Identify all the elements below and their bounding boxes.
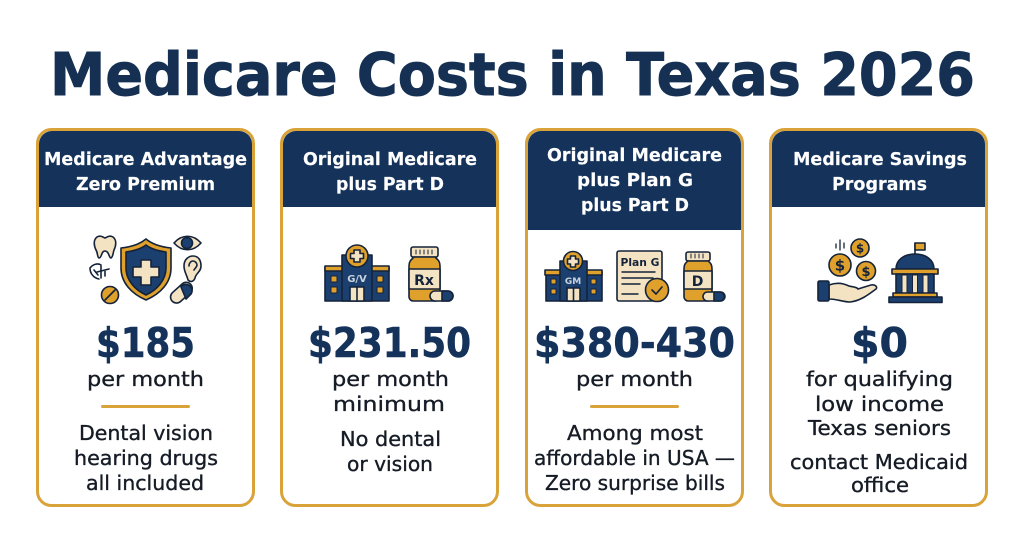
icon: Part D bottle with capsule: D <box>692 274 703 290</box>
icon: government building <box>889 243 942 302</box>
price: $0: $0 <box>851 319 908 367</box>
panel: Original Medicare plus Plan G plus Part D <box>526 130 742 506</box>
icon: coins over open hand: $ <box>835 256 845 274</box>
text: per month minimum: minimum <box>333 392 445 416</box>
text: contact Medicaid office: office <box>851 473 909 497</box>
text: contact Medicaid office <box>790 450 968 497</box>
panel: Original Medicare plus Part D <box>282 130 498 506</box>
text: qualifying seniors: Texas seniors <box>807 416 951 440</box>
icon: tooth <box>94 236 116 258</box>
icon: Part D bottle with capsule <box>684 252 725 301</box>
price: $380-430: $380-430 <box>534 319 735 367</box>
icon: capsule <box>168 280 195 305</box>
panel: Medicare Savings Programs <box>770 130 986 506</box>
text: affordability note <box>534 421 735 495</box>
icon: Plan G document with check: Plan G <box>620 257 660 269</box>
text: per month minimum <box>332 367 449 416</box>
icon: ear <box>184 256 201 281</box>
text: no dental or vision: No dental <box>340 427 441 451</box>
text: included benefits: Dental vision <box>79 421 213 445</box>
panel: Medicare Advantage Zero Premium <box>38 130 254 506</box>
text: qualifying seniors <box>806 367 953 440</box>
text: qualifying seniors: low income <box>815 392 944 416</box>
icon: hospital: G/V <box>347 274 367 285</box>
title: Medicare Costs in Texas 2026 <box>50 40 975 109</box>
text: per month: per month <box>87 367 204 391</box>
icon: hospital <box>545 252 602 301</box>
icon: dental x-ray <box>90 264 109 279</box>
text: qualifying seniors: for qualifying <box>806 367 953 391</box>
panel header: Original Medicare plus Part D <box>283 131 496 207</box>
divider <box>590 405 679 408</box>
icon: hospital: GM <box>565 277 581 287</box>
heading: Original Medicare plus Plan G plus Part D: plus Part D <box>581 195 689 216</box>
price: $231.50: $231.50 <box>308 319 471 367</box>
heading: Original Medicare plus Part D <box>303 149 477 195</box>
text: affordability note: affordable in USA — <box>534 446 735 470</box>
heading: Original Medicare plus Plan G plus Part D <box>547 145 722 216</box>
icon: coins over open hand: $ <box>856 242 864 256</box>
divider <box>101 405 190 408</box>
icon: eye <box>174 236 201 250</box>
icon: coins over open hand: $ <box>861 265 871 280</box>
icon: Rx bottle with capsule <box>409 247 453 301</box>
icon: shield with cross <box>121 239 171 300</box>
text: affordability note: Among most <box>567 421 703 445</box>
text: included benefits: hearing drugs <box>74 446 218 470</box>
text: affordability note: Zero surprise bills <box>545 471 725 495</box>
price: $185: $185 <box>96 319 195 367</box>
heading: Medicare Advantage Zero Premium: Zero Premium <box>76 174 215 195</box>
icon: Rx bottle with capsule: Rx <box>414 273 434 289</box>
text: no dental or vision: or vision <box>347 452 433 476</box>
heading: Medicare Savings Programs: Programs <box>832 174 927 195</box>
text: included benefits <box>74 421 218 495</box>
panel header: Original Medicare plus Plan G plus Part D <box>528 131 741 230</box>
heading: Original Medicare plus Part D: Original Medicare <box>303 149 477 170</box>
heading: Original Medicare plus Part D: plus Part D <box>336 174 444 195</box>
heading: Medicare Savings Programs: Medicare Savings <box>793 149 967 170</box>
text: included benefits: all included <box>86 471 204 495</box>
heading: Medicare Advantage Zero Premium <box>44 149 247 195</box>
icon: coins over open hand <box>818 239 877 302</box>
text: per month: per month <box>576 367 693 391</box>
text: no dental or vision <box>340 427 441 476</box>
text: per month minimum: per month <box>332 367 449 391</box>
heading: Medicare Advantage Zero Premium: Medicare Advantage <box>44 149 247 170</box>
text: contact Medicaid office: contact Medicaid <box>790 450 968 474</box>
icon: pill <box>102 286 118 304</box>
heading: Original Medicare plus Plan G plus Part D: Original Medicare <box>547 145 722 166</box>
icon: Plan G document with check <box>617 251 668 302</box>
heading: Medicare Savings Programs <box>793 149 967 195</box>
panel header: Medicare Savings Programs <box>772 131 985 207</box>
icon: hospital <box>325 245 389 301</box>
heading: Original Medicare plus Plan G plus Part D: plus Plan G <box>577 170 693 191</box>
panel header: Medicare Advantage <box>39 131 252 207</box>
